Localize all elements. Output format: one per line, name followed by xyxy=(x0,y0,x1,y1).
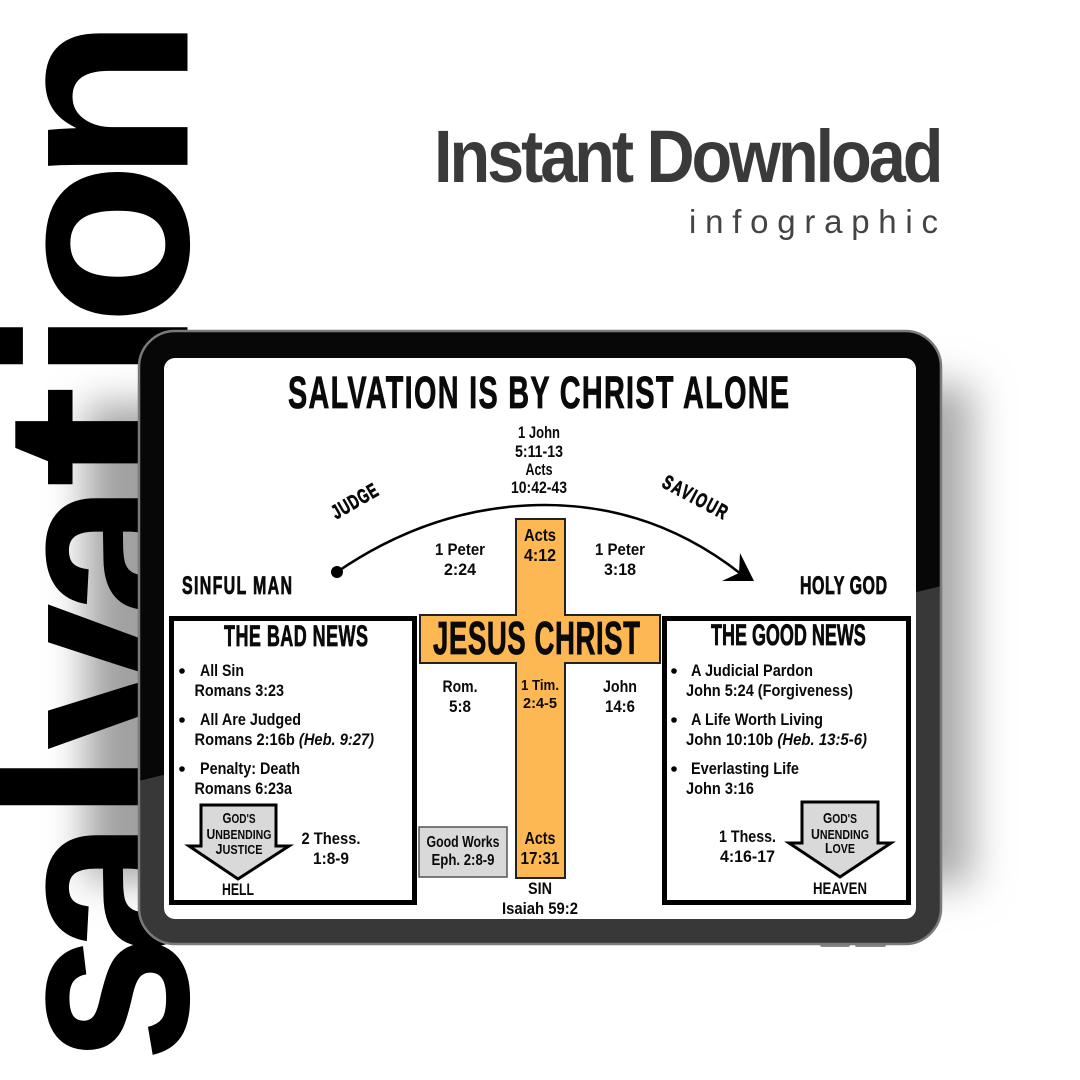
label: SIN, Isaiah 59:2 xyxy=(502,879,578,918)
arrow: God's unbending justice: JUSTICE xyxy=(216,841,263,858)
panel heading: THE GOOD NEWS: THE GOOD NEWS xyxy=(711,620,866,652)
cross reference: Acts 4:12: Acts xyxy=(524,525,556,545)
label: HEAVEN: HEAVEN xyxy=(813,879,867,898)
reference: 1 Thess. 4:16-17: 1 Thess. xyxy=(719,827,776,846)
reference: 1 Peter 2:24 xyxy=(435,540,485,579)
reference: Rom. 5:8: Rom. xyxy=(442,677,478,696)
reference: Rom. 5:8: 5:8 xyxy=(449,697,471,716)
reference: 1 Peter 2:24: 2:24 xyxy=(444,560,477,579)
reference: John 14:6 xyxy=(603,677,637,716)
poster title: SALVATION IS BY CHRIST ALONE xyxy=(288,369,789,419)
reference: 1 Peter 3:18: 1 Peter xyxy=(595,540,645,559)
panel: the good news xyxy=(664,618,908,902)
bullet list: bad news: All Are Judged xyxy=(200,710,301,729)
reference: 2 Thess. 1:8-9: 1:8-9 xyxy=(313,849,349,868)
arrow: God's unending love: LOVE xyxy=(825,840,855,857)
reference: 1 Peter 3:18: 3:18 xyxy=(604,560,636,579)
cross reference: Acts 17:31: Acts xyxy=(524,828,556,848)
vertical word: salvation xyxy=(0,16,244,1063)
bullet list: bad news: All Sin xyxy=(200,661,244,680)
panel: the bad news xyxy=(172,618,414,902)
tablet body xyxy=(130,331,950,950)
reference: 1 John, Acts xyxy=(511,423,567,497)
reference: 1 John, Acts: Acts xyxy=(526,460,552,479)
cross xyxy=(420,519,660,878)
reference: John 14:6: 14:6 xyxy=(605,697,635,716)
bullet list: good news: John 5:24 (Forgiveness) xyxy=(686,681,853,700)
arrow: God's unbending justice: UNBENDING xyxy=(206,826,272,843)
bullet list: bad news: Romans 2:16b (Heb. 9:27) xyxy=(194,730,374,749)
reference: 1 Thess. 4:16-17: 4:16-17 xyxy=(720,847,775,866)
cross reference: 1 Tim. 2:4-5: 2:4-5 xyxy=(523,696,557,712)
arrow: God's unending love: GOD'S xyxy=(823,810,857,827)
arrow: God's unbending justice xyxy=(189,805,289,879)
box: Good Works xyxy=(419,827,507,877)
bullet list: bad news: Romans 3:23 xyxy=(194,681,284,700)
bullet list: good news: John 3:16 xyxy=(686,779,754,798)
cross reference: Acts 4:12 xyxy=(524,525,556,565)
reference: 1 Peter 3:18 xyxy=(595,540,645,579)
arc arrow from man to God xyxy=(331,505,754,581)
reference: 2 Thess. 1:8-9 xyxy=(302,829,360,868)
heading: Instant Download: Instant Download xyxy=(434,115,943,198)
tablet edge xyxy=(139,331,941,944)
poster xyxy=(172,369,908,918)
bullet list: good news: A Judicial Pardon xyxy=(691,661,813,680)
tablet shadow right xyxy=(800,385,972,885)
label: JUDGE: JUDGE xyxy=(327,479,382,524)
arrow: God's unending love: UNENDING xyxy=(811,826,869,843)
subheading: infographic: infographic xyxy=(689,203,938,240)
bullet list: bad news: Penalty: Death xyxy=(200,759,300,778)
box: Good Works: Eph. 2:8-9 xyxy=(432,852,495,869)
reference: Rom. 5:8 xyxy=(442,677,478,716)
tablet side buttons xyxy=(820,942,886,947)
tablet shadow left xyxy=(86,405,236,880)
tablet mockup xyxy=(130,331,950,950)
arrow: God's unending love xyxy=(789,802,891,877)
reference: 1 Peter 2:24: 1 Peter xyxy=(435,540,485,559)
cross reference: 1 Tim. 2:4-5: 1 Tim. xyxy=(521,678,559,694)
label: HOLY GOD: HOLY GOD xyxy=(800,573,887,600)
bullet list: bad news xyxy=(179,661,374,798)
reference: 2 Thess. 1:8-9: 2 Thess. xyxy=(302,829,360,848)
cross label: JESUS CHRIST: JESUS CHRIST xyxy=(433,614,640,665)
bullet list: good news xyxy=(671,661,867,798)
box: Good Works: Good Works xyxy=(426,834,500,851)
label: SIN, Isaiah 59:2: Isaiah 59:2 xyxy=(502,899,578,918)
cross reference: Acts 17:31: 17:31 xyxy=(520,848,560,868)
tablet screen xyxy=(164,358,916,919)
label: SINFUL MAN: SINFUL MAN xyxy=(182,573,292,600)
panel heading: THE BAD NEWS: THE BAD NEWS xyxy=(224,621,368,653)
label: HELL: HELL xyxy=(222,880,254,899)
reference: 1 John, Acts: 5:11-13 xyxy=(515,442,563,461)
reference: John 14:6: John xyxy=(603,677,637,696)
cross reference: Acts 17:31 xyxy=(520,828,560,868)
cross reference: Acts 4:12: 4:12 xyxy=(524,545,556,565)
reference: 1 John, Acts: 1 John xyxy=(518,423,560,442)
label: SIN, Isaiah 59:2: SIN xyxy=(528,879,552,898)
bullet list: bad news: Romans 6:23a xyxy=(194,779,292,798)
bullet list: good news: John 10:10b (Heb. 13:5-6) xyxy=(686,730,867,749)
reference: 1 John, Acts: 10:42-43 xyxy=(511,478,567,497)
bullet list: good news: A Life Worth Living xyxy=(691,710,823,729)
reference: 1 Thess. 4:16-17 xyxy=(719,827,776,866)
label: SAVIOUR: SAVIOUR xyxy=(659,471,731,524)
bullet list: good news: Everlasting Life xyxy=(691,759,799,778)
arrow: God's unbending justice: GOD'S xyxy=(222,810,256,827)
cross reference: 1 Tim. 2:4-5 xyxy=(521,678,559,712)
